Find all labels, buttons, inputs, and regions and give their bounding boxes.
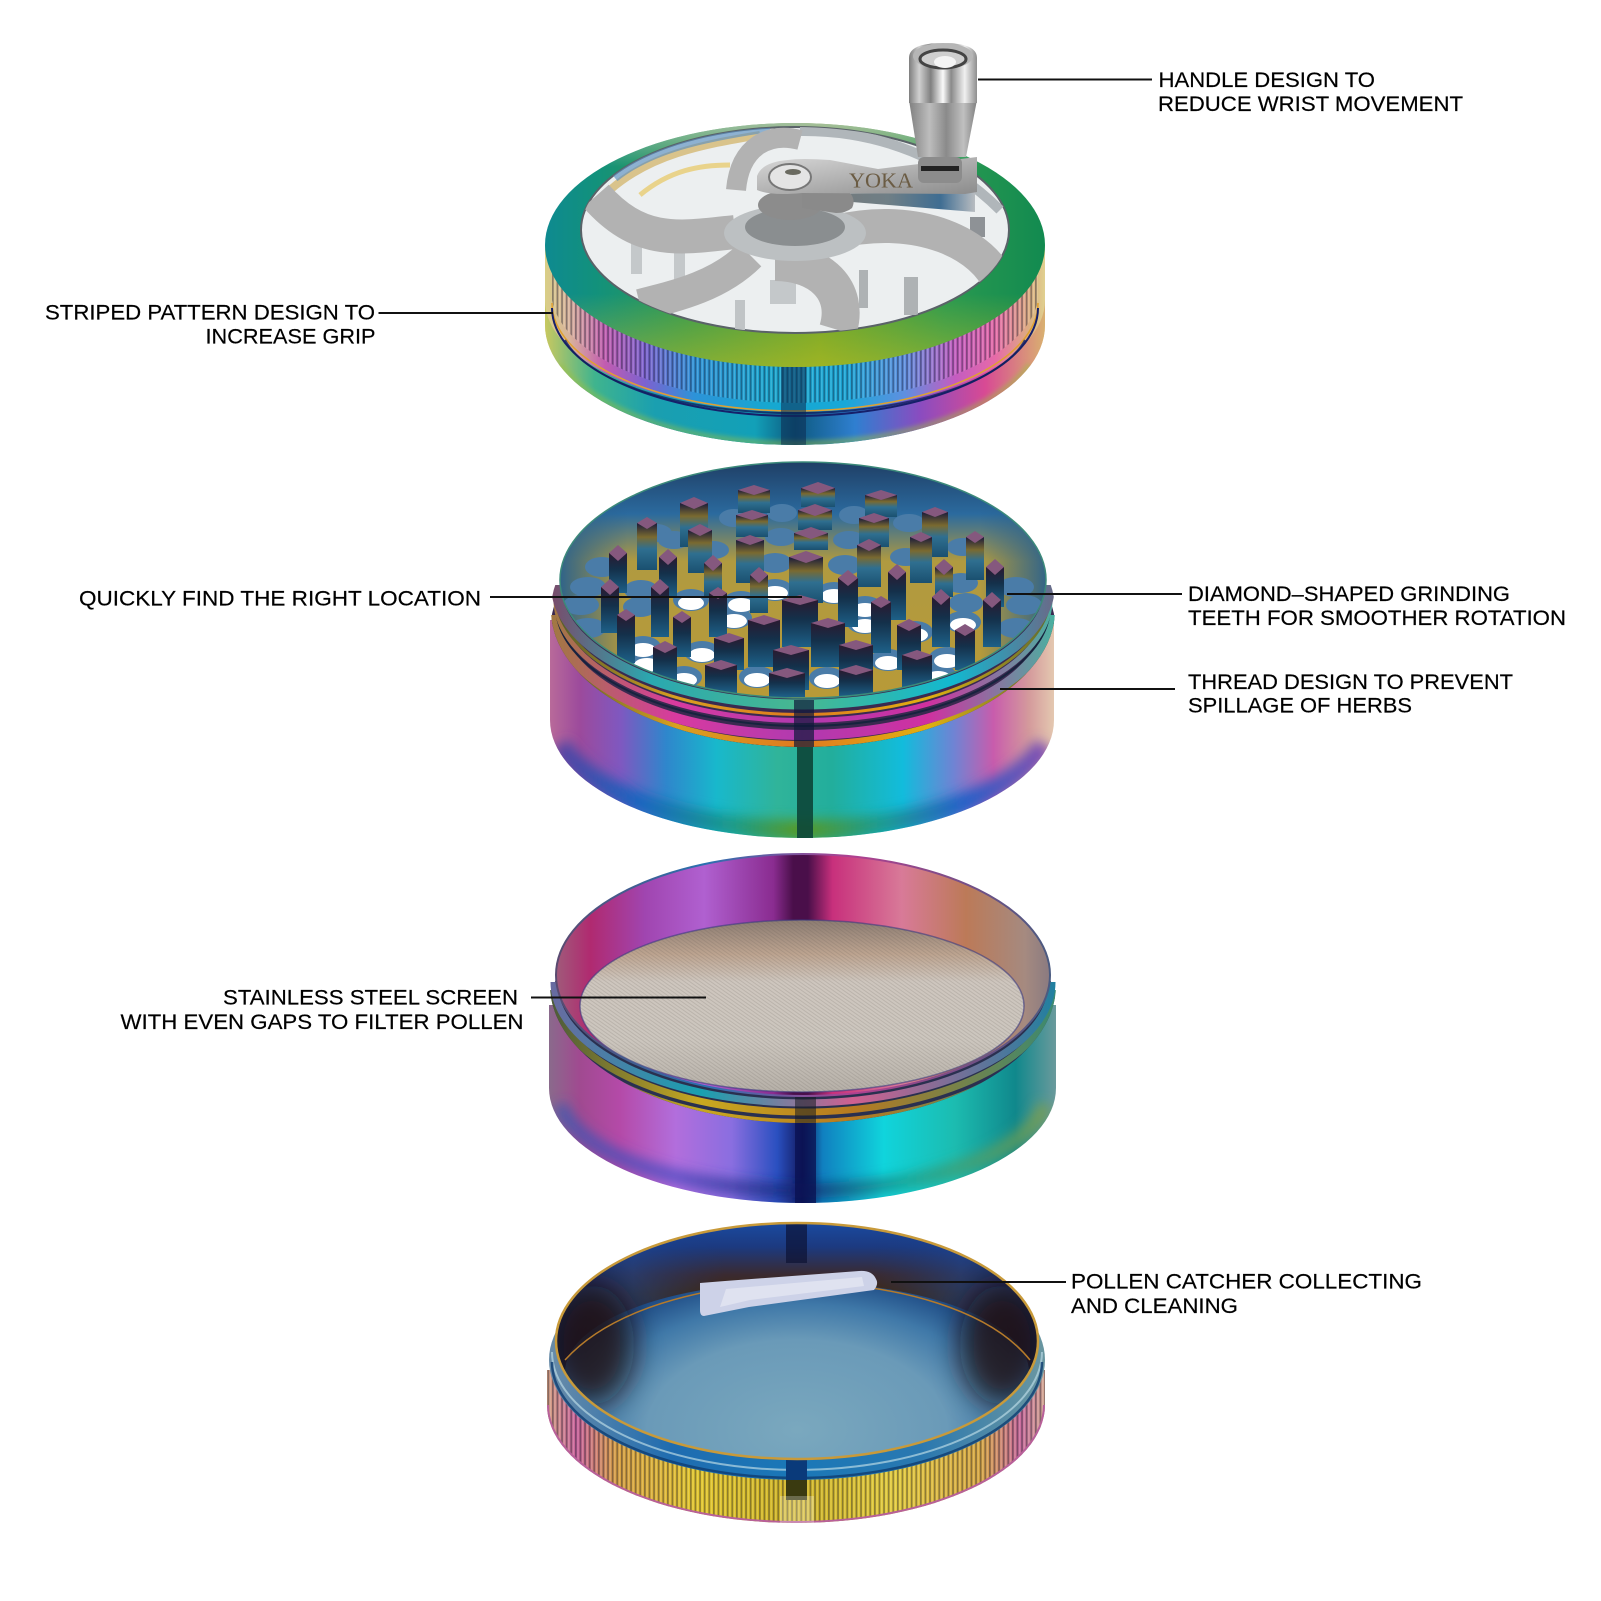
chamber floor <box>560 462 1046 698</box>
label text: AND CLEANING <box>1071 1294 1238 1318</box>
catcher body <box>547 1370 1045 1523</box>
glass window <box>581 127 1009 333</box>
lid top ring <box>545 123 1045 367</box>
panel: pollen catcher <box>547 1223 1045 1524</box>
spoke lower left <box>640 255 750 305</box>
chamber bottom glow <box>560 745 1044 830</box>
label text: STAINLESS STEEL SCREEN <box>223 986 518 1010</box>
scoop inner <box>720 1277 864 1307</box>
tooth shadow 3 <box>770 280 796 304</box>
pivot socket <box>785 169 801 175</box>
arm top <box>757 157 977 194</box>
screen thread gold 2 <box>553 990 1053 1112</box>
screen chamber seam <box>795 1123 816 1203</box>
lid side wall <box>545 245 1045 445</box>
label text: HANDLE DESIGN TO <box>1158 68 1375 92</box>
screen thread base <box>550 887 1056 1123</box>
lid ring highlight <box>545 123 1045 367</box>
handle collar ring <box>921 166 959 171</box>
arm pivot column <box>758 190 822 220</box>
top wall center shade <box>786 1223 807 1263</box>
leader line <box>531 996 706 998</box>
thread magenta <box>556 615 1050 735</box>
callout: striped pattern <box>45 300 553 348</box>
arm tab <box>802 193 854 213</box>
mesh surface <box>580 920 1024 1092</box>
lid lower lip <box>545 300 1045 445</box>
callout: handle design <box>978 68 1463 116</box>
window contents <box>596 128 1000 330</box>
thread dark line <box>556 606 1050 726</box>
thread base <box>552 604 1054 747</box>
leader line <box>891 1281 1066 1283</box>
spoke down <box>775 262 841 330</box>
leader line <box>1000 688 1175 690</box>
catcher floor <box>550 1223 1044 1462</box>
window wall reflection gold <box>640 165 730 195</box>
handle cap rim <box>913 43 973 69</box>
label text <box>1188 670 1513 718</box>
chamber seam band <box>797 747 813 838</box>
handle collar <box>918 157 962 183</box>
label text <box>1158 68 1463 116</box>
arm side <box>802 192 975 212</box>
screen thread teal <box>554 982 1052 1103</box>
screen chamber bottom glow <box>560 1105 1045 1191</box>
spoke right <box>835 226 1000 285</box>
handle shaft <box>909 100 977 157</box>
tooth shadow 4 <box>909 213 924 235</box>
screen chamber body <box>549 1005 1056 1203</box>
catcher ribs <box>547 1370 1045 1523</box>
spoke up <box>736 138 800 190</box>
chamber body <box>550 620 1054 838</box>
leader line <box>378 312 553 314</box>
scoop body <box>700 1271 877 1316</box>
screen thread gold <box>551 1000 1055 1122</box>
lid grooves <box>552 303 1038 411</box>
lid bottom glow <box>560 365 1030 444</box>
thread teal <box>556 585 1050 704</box>
handle cap center <box>920 50 966 68</box>
catcher thread base <box>549 1240 1045 1480</box>
panel: pollen screen chamber <box>549 854 1056 1203</box>
inner rim line <box>556 854 1050 1096</box>
screen mesh <box>580 920 1024 1092</box>
floor surface <box>565 1282 1029 1462</box>
label text: INCREASE GRIP <box>206 324 376 348</box>
catcher seam blue <box>786 1460 807 1480</box>
tooth shadow 8 <box>735 300 745 330</box>
panel: grinding chamber with teeth <box>550 462 1055 838</box>
tooth shadow 1 <box>631 244 642 274</box>
catcher wall blue edges <box>556 1223 1038 1459</box>
label text: STRIPED PATTERN DESIGN TO <box>45 300 375 324</box>
catcher gold rim <box>556 1223 1038 1459</box>
label text <box>1071 1270 1422 1318</box>
mesh texture <box>580 920 1024 1092</box>
hub <box>724 205 866 261</box>
label text: DIAMOND–SHAPED GRINDING <box>1188 582 1510 606</box>
label text: REDUCE WRIST MOVEMENT <box>1158 92 1463 116</box>
lid lower groove <box>565 340 1025 413</box>
leader line <box>978 78 1152 80</box>
label text: THREAD DESIGN TO PREVENT <box>1188 670 1513 694</box>
handle cap dot <box>934 56 956 68</box>
callout: thread design <box>1000 670 1513 718</box>
inner wall blue edge <box>580 920 1024 1092</box>
catcher thread light <box>552 1352 1042 1470</box>
catcher seam dark <box>786 1480 807 1500</box>
handle head <box>909 43 977 103</box>
thread seam band <box>794 700 814 747</box>
callout: diamond teeth <box>1007 582 1566 630</box>
label text: QUICKLY FIND THE RIGHT LOCATION <box>79 586 481 610</box>
screen threads <box>550 887 1056 1123</box>
thread pink <box>556 600 1050 720</box>
window wall reflection blue <box>615 128 770 178</box>
catcher seam ribs <box>780 1496 814 1524</box>
tooth shadow 6 <box>859 270 868 308</box>
through holes openings <box>630 586 976 688</box>
spoke left <box>596 196 735 236</box>
leader line <box>1007 593 1182 595</box>
floor gold edge <box>565 1282 1030 1360</box>
pivot screw <box>769 164 811 190</box>
floor left shade <box>550 1285 634 1405</box>
window wall reflection grey <box>800 131 1000 210</box>
screen thread seam <box>795 1097 816 1123</box>
inner wall <box>556 854 1050 1096</box>
catcher bottom pink edge <box>547 1405 1045 1523</box>
tooth shadow 2 <box>674 253 685 280</box>
lid seam band <box>781 367 806 445</box>
window wall reflection <box>610 135 760 190</box>
thread orange <box>556 620 1050 744</box>
label text: WITH EVEN GAPS TO FILTER POLLEN <box>120 1010 524 1034</box>
thread gold <box>558 614 1048 716</box>
diamond teeth <box>601 482 1004 697</box>
lid groove dark <box>552 308 1038 416</box>
label text <box>1188 582 1566 630</box>
label text: SPILLAGE OF HERBS <box>1188 694 1412 718</box>
striped grip ribs <box>552 262 1038 403</box>
chamber holes and teeth <box>563 482 1042 697</box>
hub inner <box>745 208 845 246</box>
catcher thread dark <box>552 1362 1042 1478</box>
label text <box>45 300 376 348</box>
brand YOKA: YOKA <box>849 168 914 192</box>
callout: stainless steel screen <box>120 986 706 1034</box>
leader line <box>490 596 802 598</box>
chamber rim <box>560 462 1046 698</box>
chamber blue edge <box>560 462 1046 698</box>
through holes rings <box>625 579 981 689</box>
threads <box>551 585 1055 747</box>
catcher wall <box>556 1223 1038 1459</box>
panel: lid with crank handle <box>545 43 1045 445</box>
thread dark edge <box>551 622 1055 747</box>
label text: POLLEN CATCHER COLLECTING <box>1071 1270 1422 1294</box>
blue holes <box>563 504 1042 638</box>
callout: pollen catcher <box>891 1270 1422 1318</box>
tooth shadow 7 <box>904 277 918 315</box>
scoop <box>700 1271 877 1316</box>
floor right shade <box>960 1285 1044 1405</box>
tooth shadow 5 <box>970 217 985 237</box>
label text: TEETH FOR SMOOTHER ROTATION <box>1188 606 1566 630</box>
label text <box>120 986 524 1034</box>
